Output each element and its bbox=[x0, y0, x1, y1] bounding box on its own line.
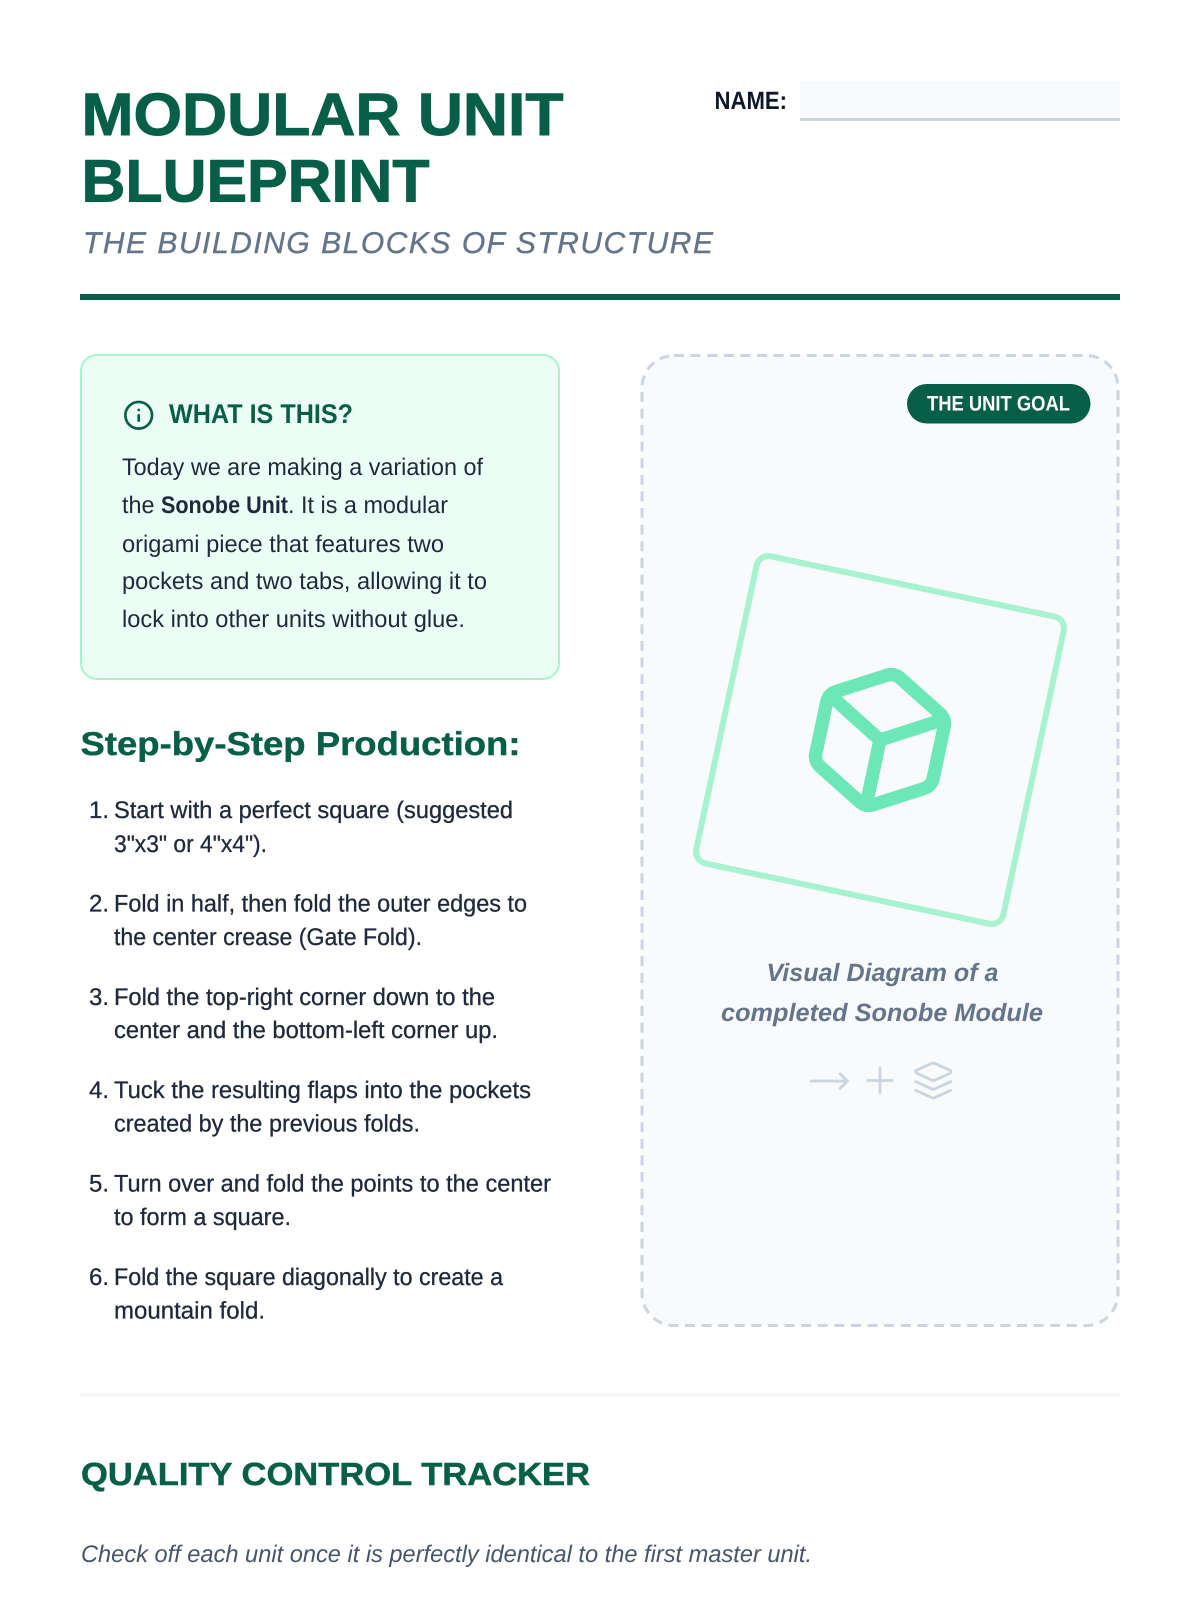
panel body text: Today we are making a variation of bbox=[122, 454, 483, 481]
panel body text: the bbox=[122, 492, 161, 519]
step 6: Fold the square diagonally to create a bbox=[114, 1264, 504, 1291]
step 1: Start with a perfect square (suggested bbox=[114, 797, 513, 824]
badge: the unit goal bbox=[907, 384, 1090, 424]
step 4: Tuck the resulting flaps into the pockets bbox=[114, 1077, 531, 1104]
step 5: 5. bbox=[89, 1170, 109, 1198]
icon: cube bbox=[807, 662, 953, 818]
numbered steps list bbox=[89, 797, 551, 1324]
panel body text: lock into other units without glue. bbox=[122, 606, 465, 633]
badge: the unit goal: THE UNIT GOAL bbox=[927, 392, 1070, 416]
panel: unit goal diagram bbox=[642, 356, 1118, 1326]
step 3 bbox=[89, 984, 498, 1044]
icon: arrow bbox=[811, 1074, 847, 1088]
header rule bbox=[80, 294, 1120, 300]
panel body text bbox=[122, 454, 487, 633]
title: MODULAR UNIT bbox=[82, 81, 564, 148]
icon: plus bbox=[868, 1068, 892, 1093]
heading: steps: Step-by-Step Production: bbox=[80, 725, 520, 762]
step 4: created by the previous folds. bbox=[114, 1110, 420, 1138]
step 3: center and the bottom-left corner up. bbox=[114, 1017, 498, 1044]
heading: quality control tracker: QUALITY CONTROL TRACKER bbox=[81, 1456, 590, 1492]
subtitle: THE BUILDING BLOCKS OF STRUCTURE bbox=[83, 227, 714, 260]
diagram caption: completed Sonobe Module bbox=[721, 999, 1043, 1027]
title: BLUEPRINT bbox=[82, 148, 430, 214]
step 2: Fold in half, then fold the outer edges to bbox=[114, 890, 527, 918]
tracker instruction note: Check off each unit once it is perfectly identical to the first master unit. bbox=[81, 1541, 812, 1568]
step 4: 4. bbox=[89, 1077, 109, 1104]
diagram caption: Visual Diagram of a bbox=[766, 959, 999, 987]
step 3: 3. bbox=[89, 984, 109, 1011]
step 4 bbox=[89, 1077, 531, 1138]
step 2: 2. bbox=[89, 890, 109, 918]
title bbox=[82, 81, 564, 214]
step 6 bbox=[89, 1264, 504, 1324]
panel body text: pockets and two tabs, allowing it to bbox=[122, 568, 487, 595]
step 5 bbox=[89, 1170, 551, 1231]
step 1: 1. bbox=[89, 797, 109, 824]
step 1: 3"x3" or 4"x4"). bbox=[114, 831, 267, 858]
step 1 bbox=[89, 797, 513, 858]
step 5: to form a square. bbox=[114, 1204, 291, 1231]
name field: NAME: bbox=[714, 87, 787, 115]
step 2: the center crease (Gate Fold). bbox=[114, 924, 422, 951]
step 6: mountain fold. bbox=[114, 1298, 265, 1324]
name field bbox=[714, 81, 1120, 121]
icon: layers bbox=[916, 1063, 951, 1098]
diagram caption bbox=[721, 959, 1043, 1027]
step 5: Turn over and fold the points to the center bbox=[114, 1170, 551, 1198]
step 6: 6. bbox=[89, 1264, 109, 1291]
rotated square outline bbox=[694, 554, 1066, 926]
step 2 bbox=[89, 890, 527, 951]
panel body text: Sonobe Unit bbox=[161, 492, 288, 519]
panel: what is this bbox=[81, 355, 559, 679]
panel heading: WHAT IS THIS? bbox=[169, 399, 353, 429]
icon: info bbox=[125, 402, 152, 429]
header bbox=[80, 81, 1120, 300]
step 3: Fold the top-right corner down to the bbox=[114, 984, 495, 1011]
panel body text: origami piece that features two bbox=[122, 531, 444, 558]
panel body text: . It is a modular bbox=[288, 492, 448, 519]
